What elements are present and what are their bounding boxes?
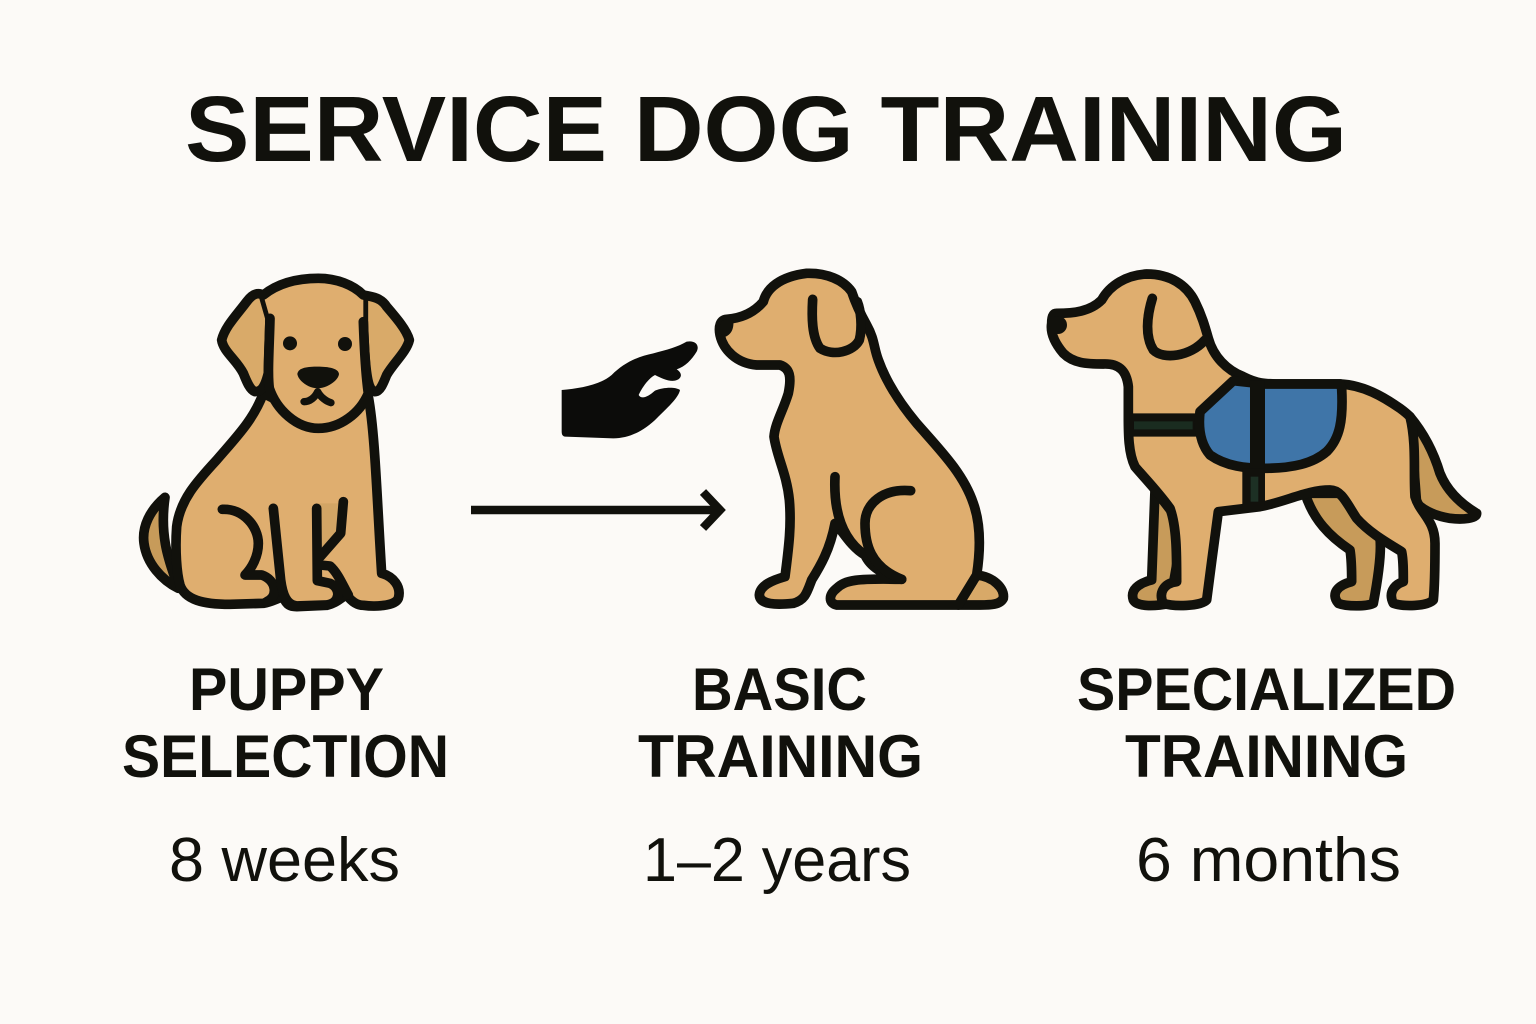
chest strap: [1130, 413, 1202, 437]
vest belly strap: [1242, 468, 1265, 506]
puppy left ear: [222, 294, 270, 392]
sitting dog tail foot: [958, 575, 1003, 605]
tail: [1410, 417, 1477, 519]
step 3 heading: [1077, 656, 1456, 790]
standing dog body: [1051, 274, 1435, 606]
service vest: [1199, 381, 1342, 468]
icon: puppy sitting: [144, 278, 409, 607]
sitting dog leg line: [835, 477, 865, 555]
puppy far paw shadow: [318, 503, 341, 558]
puppy mouth: [304, 392, 331, 403]
puppy body: [176, 393, 399, 607]
step 3 heading: TRAINING: [1125, 723, 1408, 790]
puppy tail: [144, 497, 178, 588]
step 2 duration: 1–2 years: [643, 826, 911, 895]
step 1 heading: [122, 656, 449, 790]
sitting dog haunch: [865, 490, 911, 579]
far hind leg: [1305, 493, 1380, 606]
icon: dog with service vest: [1049, 274, 1477, 606]
arrow: [471, 492, 720, 528]
puppy nose: [297, 367, 339, 388]
puppy right ear: [363, 295, 409, 392]
step 3 duration: 6 months: [1136, 826, 1401, 895]
puppy eyes: [283, 336, 297, 350]
step 2 heading: BASIC: [692, 656, 867, 723]
puppy haunch line: [222, 509, 274, 602]
far front leg: [1133, 490, 1183, 606]
step 1 duration: 8 weeks: [169, 826, 400, 895]
vest vertical strap: [1250, 381, 1265, 468]
step 1 heading: PUPPY: [189, 656, 384, 723]
icon: hand signal: [562, 341, 698, 438]
sitting dog ear: [812, 299, 861, 352]
step 3 heading: SPECIALIZED: [1077, 656, 1456, 723]
icon: dog sitting in profile: [719, 273, 1003, 605]
title: SERVICE DOG TRAINING: [185, 77, 1347, 181]
standing dog nose: [1049, 316, 1067, 334]
sitting dog nose: [719, 319, 733, 337]
sitting dog body: [719, 273, 979, 605]
puppy head: [263, 278, 368, 428]
step 2 heading: [638, 656, 923, 790]
standing dog ear: [1148, 298, 1205, 356]
puppy front legs: [273, 508, 338, 606]
step 1 heading: SELECTION: [122, 723, 449, 790]
step 2 heading: TRAINING: [638, 723, 923, 790]
